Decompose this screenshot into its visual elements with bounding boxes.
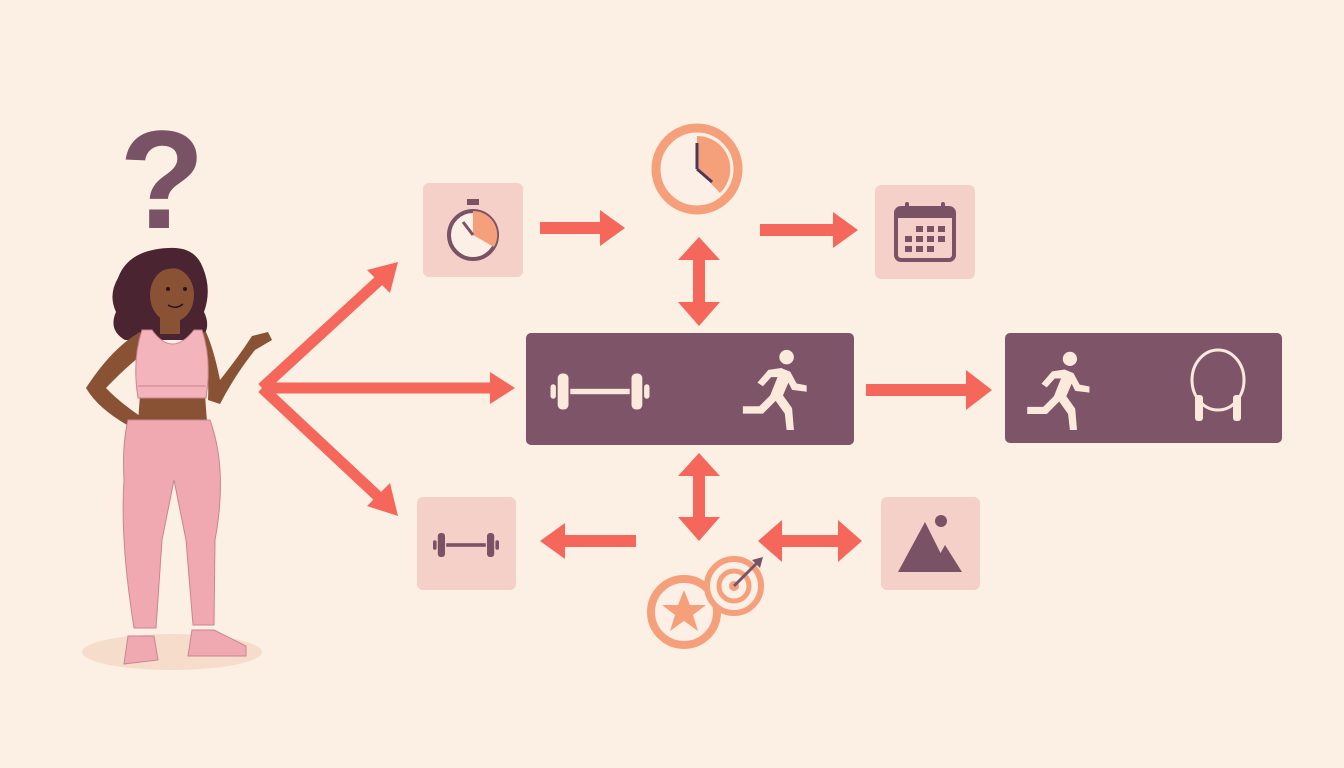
icon box: dumbbell: [417, 497, 516, 590]
icon: clock: [656, 128, 738, 210]
double arrow vertical: clock to main box: [678, 237, 720, 326]
midriff: [138, 395, 207, 422]
double arrow horizontal: goals to mountain: [758, 520, 862, 562]
icon box: stopwatch: [423, 183, 523, 277]
arrow: clock to calendar: [760, 212, 858, 248]
neck: [160, 312, 180, 334]
fork arrows from woman: [262, 262, 515, 516]
head: [150, 268, 194, 322]
icons: star badge and target: [651, 557, 763, 645]
sports bra: [136, 330, 208, 398]
arrow: to dumbbell box: [540, 523, 636, 559]
icon box: calendar: [875, 185, 975, 279]
box: cardio and jump rope: [1005, 333, 1282, 443]
left arm on hip: [86, 332, 152, 432]
leggings: [123, 420, 220, 628]
icon box: mountain: [881, 497, 980, 590]
hair: [112, 248, 208, 340]
woman figure: [82, 248, 272, 670]
shoes: [124, 636, 158, 664]
arrow: stopwatch to clock: [540, 210, 625, 246]
double arrow vertical: main box to goals: [678, 453, 720, 541]
right arm raised: [196, 332, 272, 404]
arrow: main box to cardio box: [866, 370, 992, 410]
main box: strength and cardio: [526, 333, 854, 445]
question mark: ?: [119, 101, 205, 258]
